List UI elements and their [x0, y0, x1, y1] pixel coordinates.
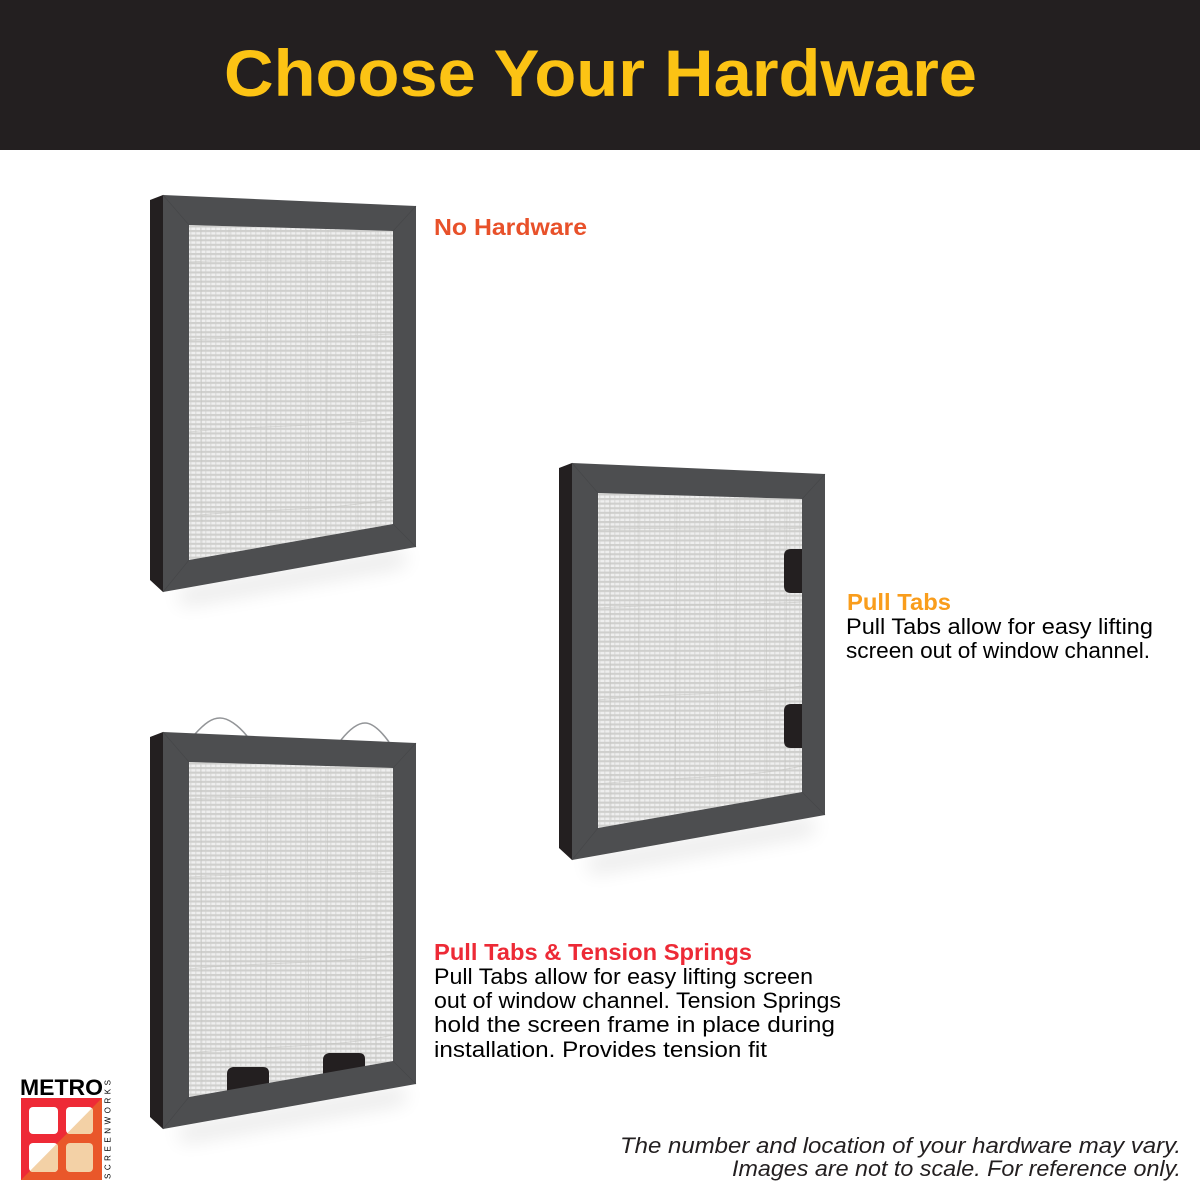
- panel: pull tabs screen: [559, 463, 825, 873]
- label: no hardware: No Hardware: [434, 214, 587, 240]
- text block: pull tabs: Pull Tabs: [847, 589, 951, 615]
- text block: pull tabs and tension springs: installation. Provides tension fit: [434, 1037, 767, 1062]
- footnote: The number and location of your hardware may vary.: [620, 1133, 1181, 1158]
- icon: upper pull tab: [784, 549, 802, 593]
- text block: pull tabs and tension springs: hold the screen frame in place during: [434, 1012, 835, 1037]
- text block: pull tabs: [846, 589, 1153, 663]
- panel: no hardware screen: [150, 195, 416, 605]
- footnote: Images are not to scale. For reference only.: [732, 1156, 1181, 1181]
- text block: pull tabs: screen out of window channel.: [846, 638, 1150, 663]
- panel: pull tabs and tension springs screen: [150, 718, 416, 1142]
- text block: pull tabs: Pull Tabs allow for easy lifting: [846, 614, 1153, 639]
- footnote: [620, 1133, 1181, 1181]
- logo: Metro Screenworks: [20, 1075, 112, 1180]
- icon: lower pull tab: [784, 704, 802, 748]
- text block: pull tabs and tension springs: Pull Tabs allow for easy lifting screen: [434, 964, 813, 989]
- logo: Metro Screenworks: SCREENWORKS: [104, 1080, 112, 1179]
- icon: bottom pull tab right: [323, 1053, 365, 1076]
- logo: Metro Screenworks: METRO: [20, 1075, 103, 1100]
- icon: bottom pull tab left: [227, 1067, 269, 1093]
- text block: pull tabs and tension springs: Pull Tabs & Tension Springs: [434, 939, 752, 965]
- icon: tension springs: [195, 718, 389, 742]
- header band: [0, 0, 1200, 150]
- title: Choose Your Hardware: [224, 36, 977, 110]
- text block: pull tabs and tension springs: out of window channel. Tension Springs: [434, 988, 841, 1013]
- text block: pull tabs and tension springs: [434, 939, 841, 1062]
